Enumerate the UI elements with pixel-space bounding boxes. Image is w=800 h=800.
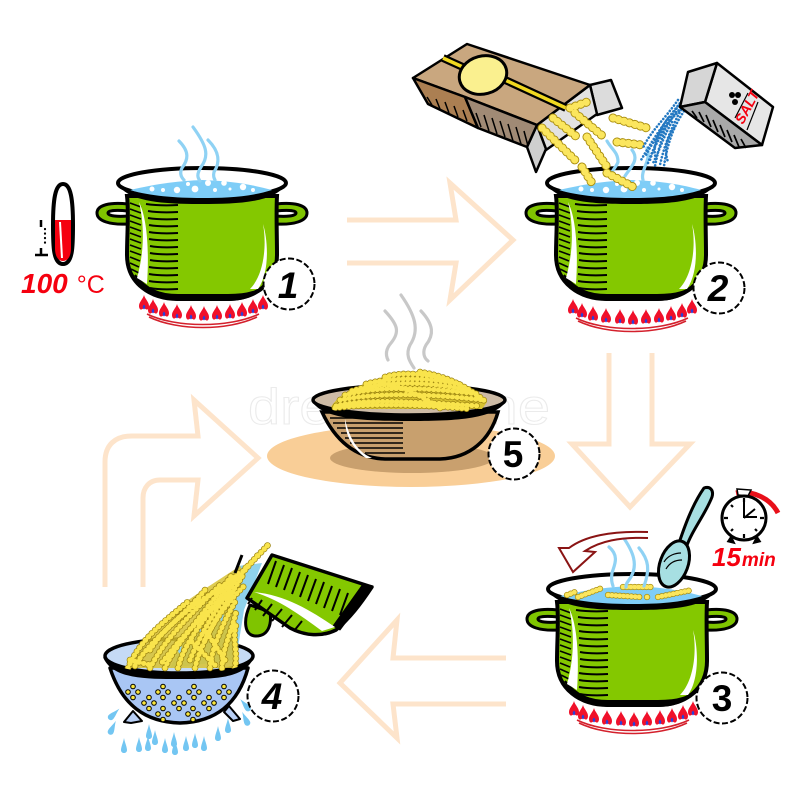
burner 2 (568, 299, 697, 332)
alarm clock (722, 489, 778, 542)
bubbles 2 (578, 180, 684, 193)
bowl shadow (330, 443, 494, 473)
salt label: SALT (732, 86, 763, 126)
arrow: step 3 to 4 (340, 620, 506, 738)
stirring direction arrow (559, 532, 648, 572)
colander rim (103, 657, 254, 679)
colander holes (126, 684, 231, 722)
step 1: boiling pot (97, 127, 314, 328)
steam 2 (607, 141, 648, 180)
steam 1 (179, 127, 218, 181)
number 5: 5 (503, 434, 523, 475)
number 1 (264, 258, 314, 310)
number 3 (696, 672, 748, 724)
step 5: serving bowl (267, 295, 555, 487)
step 4: draining (103, 545, 373, 755)
temperature label: 100 °C (21, 268, 105, 299)
pasta stream (127, 545, 268, 668)
colander (105, 639, 253, 723)
water drops (107, 697, 252, 755)
pot rim tipped (235, 555, 242, 573)
pot handle in hand (246, 555, 373, 636)
falling pasta (542, 102, 647, 188)
steam 3 (609, 537, 648, 587)
salt grains (640, 96, 692, 166)
burner 3 (569, 701, 698, 734)
number 4 (248, 670, 298, 722)
arrow: step 4 to 5 (105, 400, 258, 587)
burner 1 (139, 295, 268, 328)
pot 3 (527, 574, 737, 706)
spoon (653, 487, 713, 591)
salt box (680, 63, 773, 148)
arrow: step 1 to 2 (347, 183, 513, 300)
watermark: dreamstime (248, 379, 550, 435)
step 3: simmer 15 minutes (527, 487, 778, 734)
pasta mound (331, 372, 487, 409)
table oval (267, 425, 555, 487)
time label: 15min (712, 542, 776, 572)
number 5 (488, 428, 540, 480)
number 1: 1 (278, 265, 298, 306)
pot 2 (526, 168, 736, 300)
number 2 (694, 262, 744, 314)
water stream (170, 563, 262, 668)
steam 5 (385, 295, 431, 368)
bubbles 1 (150, 180, 255, 193)
bowl (322, 412, 498, 459)
pot 1 (97, 168, 307, 300)
pasta box (413, 44, 622, 172)
number 3: 3 (712, 678, 732, 719)
number 4: 4 (261, 676, 282, 717)
arrow: step 2 to 3 (572, 353, 690, 507)
step 2: adding pasta and salt (413, 44, 773, 332)
thermometer (35, 184, 73, 264)
number 2: 2 (707, 268, 729, 309)
pasta in pot (567, 587, 692, 598)
